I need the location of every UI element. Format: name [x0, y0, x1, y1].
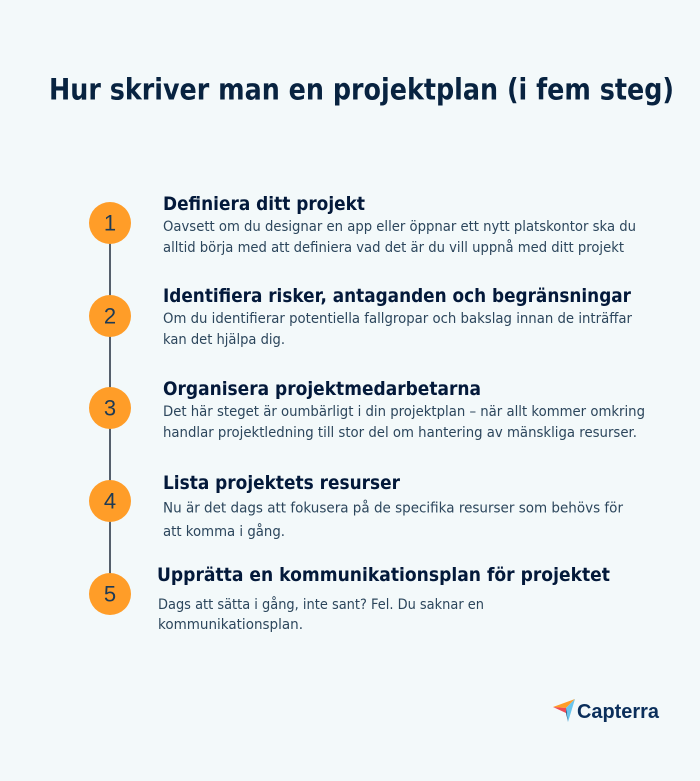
- step 1 heading: Definiera ditt projekt: [163, 193, 365, 215]
- Capterra logo: [553, 699, 660, 723]
- step 4 text: [163, 500, 623, 540]
- step 5 text: Dags att sätta i gång, inte sant? Fel. Du saknar en: [158, 596, 484, 613]
- timeline connector: [109, 240, 111, 580]
- step 1 text: [163, 219, 636, 256]
- step 4 text: att komma i gång.: [163, 523, 285, 540]
- step 3: [89, 378, 645, 441]
- step 4 text: Nu är det dags att fokusera på de specifika resurser som behövs för: [163, 500, 623, 516]
- step 2 text: [163, 311, 632, 348]
- step 5 badge: 5: [104, 582, 116, 606]
- step 1 badge: 1: [104, 210, 116, 236]
- step 2 text: kan det hjälpa dig.: [163, 332, 285, 348]
- step 1 text: Oavsett om du designar en app eller öppnar ett nytt platskontor ska du: [163, 219, 636, 235]
- step 4 badge: [89, 480, 131, 522]
- step 4 badge: 4: [104, 488, 116, 514]
- step 5: [89, 564, 610, 633]
- step 2 heading: Identifiera risker, antaganden och begränsningar: [163, 285, 632, 307]
- step 1 badge: [89, 202, 131, 244]
- step 2 text: Om du identifierar potentiella fallgropar och bakslag innan de inträffar: [163, 311, 632, 327]
- step 5 text: [158, 596, 484, 633]
- wordmark: Capterra: [577, 701, 660, 723]
- step 5 heading: Upprätta en kommunikationsplan för projektet: [157, 564, 610, 586]
- step 4: [89, 472, 623, 540]
- step 3 text: [163, 404, 645, 441]
- step 3 badge: [89, 387, 131, 429]
- step 2: [89, 285, 632, 348]
- icon: Capterra arrow: [553, 699, 575, 722]
- step 3 heading: Organisera projektmedarbetarna: [163, 378, 481, 400]
- step 4 heading: Lista projektets resurser: [163, 472, 401, 494]
- step 1: [89, 193, 636, 256]
- step 3 badge: 3: [104, 396, 116, 420]
- step 1 text: alltid börja med att definiera vad det är du vill uppnå med ditt projekt: [163, 239, 624, 256]
- step 5 badge: [89, 573, 131, 615]
- step 3 text: Det här steget är oumbärligt i din projektplan – när allt kommer omkring: [163, 404, 645, 420]
- step 5 text: kommunikationsplan.: [158, 617, 303, 633]
- step 3 text: handlar projektledning till stor del om hantering av mänskliga resurser.: [163, 425, 637, 441]
- step 2 badge: 2: [104, 304, 116, 328]
- step 2 badge: [89, 295, 131, 337]
